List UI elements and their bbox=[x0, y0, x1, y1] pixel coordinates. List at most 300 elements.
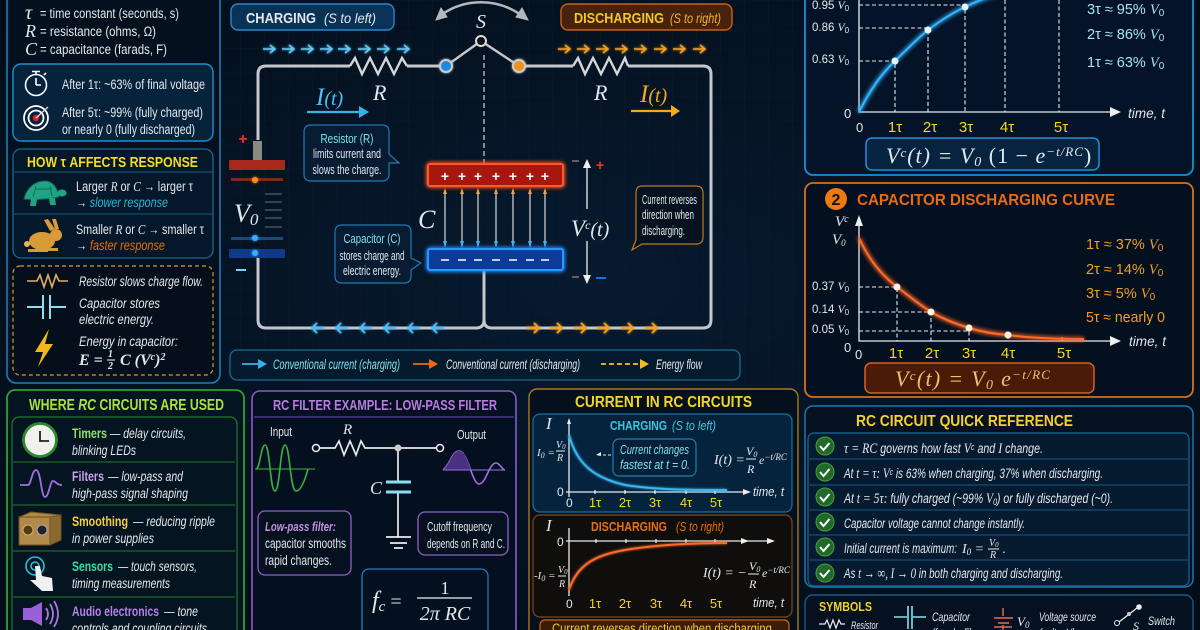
chart: capacitor charging: 0 bbox=[1159, 33, 1165, 44]
list: quick reference facts: At t = τ: V bbox=[844, 466, 901, 482]
battery V0: V bbox=[234, 199, 250, 228]
formula: discharging: 0 bbox=[986, 378, 994, 393]
chart: charging current: 4τ bbox=[680, 495, 693, 510]
chart: capacitor charging: 4τ bbox=[1000, 119, 1014, 136]
row: sensors: Sensors bbox=[72, 559, 113, 574]
callout: low-pass bbox=[258, 511, 351, 575]
chart: capacitor discharging: 4τ bbox=[1001, 345, 1015, 362]
input signal: Input bbox=[270, 425, 292, 439]
chart: charging current: = bbox=[545, 447, 555, 459]
arrows: charging current top bbox=[263, 45, 409, 53]
list: quick reference facts bbox=[843, 441, 1113, 582]
chart: capacitor discharging: 0.37 V bbox=[812, 281, 845, 293]
box: resistor, capacitor and energy notes: Resistor slows charge flow. bbox=[79, 274, 203, 289]
chart: capacitor charging: 0 bbox=[844, 106, 851, 121]
chart: charging current: 0 bbox=[566, 496, 573, 510]
symbol: voltage source bbox=[994, 608, 1096, 630]
chart: discharging current: 3τ bbox=[650, 596, 663, 611]
list: quick reference facts: is 63% when charging, 37% when discharging. bbox=[893, 466, 1103, 481]
electric field arrows bbox=[443, 188, 547, 248]
bottom plate bbox=[428, 249, 563, 270]
list: quick reference facts: Initial current is maximum: bbox=[844, 541, 957, 556]
chart: capacitor discharging: V bbox=[835, 214, 844, 230]
formula: charging: V bbox=[886, 143, 900, 168]
chart: discharging current: e bbox=[762, 566, 767, 580]
panel: definitions and response bbox=[7, 0, 220, 383]
legend: Conventional current (discharging) bbox=[446, 357, 580, 372]
row: audio electronics: Audio electronics bbox=[72, 604, 159, 619]
formula: cutoff frequency: c bbox=[379, 599, 386, 615]
symbol: switch bbox=[1114, 604, 1175, 630]
chart: capacitor discharging: 3τ ≈ 5% V bbox=[1086, 286, 1150, 302]
callout: resistor: limits current and bbox=[313, 146, 381, 161]
top plate: + bbox=[458, 168, 466, 184]
formula: charging: −t/RC bbox=[1046, 144, 1084, 159]
list: quick reference facts: τ = RC governs how fast V bbox=[844, 441, 983, 457]
formula: discharging: −t/RC bbox=[1012, 367, 1051, 382]
chart: charging current: I bbox=[545, 414, 553, 433]
formula: discharging bbox=[865, 363, 1094, 393]
icon: turtle bbox=[24, 181, 66, 206]
chart: capacitor discharging: V bbox=[832, 232, 841, 248]
chart: discharging current: 0 bbox=[756, 565, 760, 574]
panel: quick reference bbox=[805, 406, 1193, 587]
chart: discharging current: R bbox=[558, 579, 565, 590]
switch contacts bbox=[440, 36, 525, 72]
label: discharging bbox=[561, 4, 732, 30]
chart: capacitor discharging: time, t bbox=[1129, 334, 1167, 349]
label: charging bbox=[231, 4, 394, 30]
chart: charging current: 2τ bbox=[619, 495, 632, 510]
row: smoothing: — reducing ripple bbox=[132, 514, 215, 529]
icon: target bbox=[24, 106, 48, 130]
formula: charging: (t) = V bbox=[907, 143, 976, 168]
chart: capacitor discharging: 0 bbox=[845, 285, 850, 294]
text: variable definitions: = resistance (ohms, Ω) bbox=[40, 24, 156, 39]
chart: capacitor discharging: 0.05 V bbox=[812, 324, 845, 336]
chart: discharging current: 0 bbox=[541, 574, 545, 583]
row: smoothing bbox=[19, 512, 215, 546]
legend bbox=[230, 350, 740, 380]
list: quick reference facts: I bbox=[962, 542, 967, 557]
icon: speaker bbox=[23, 601, 58, 627]
chart: capacitor discharging: 3τ bbox=[962, 345, 976, 362]
row: smoothing: in power supplies bbox=[72, 531, 154, 546]
chart: charging current: V bbox=[746, 444, 753, 458]
top plate: + bbox=[474, 168, 482, 184]
label: S: S bbox=[476, 11, 486, 33]
formula: charging: ) bbox=[1084, 143, 1092, 168]
chart: charging current: 0 bbox=[562, 443, 566, 451]
chart: capacitor discharging: 0.14 V bbox=[812, 304, 845, 316]
labels: R and I(t) right: I(t) bbox=[639, 81, 668, 108]
callout: capacitor: Capacitor (C) bbox=[344, 231, 400, 246]
panel: current in RC circuits bbox=[529, 389, 798, 630]
formula: capacitor energy: ) bbox=[153, 352, 160, 369]
icon: lightning bolt bbox=[35, 329, 53, 367]
text: variable definitions: = time constant (seconds, s) bbox=[40, 6, 179, 21]
symbol: capacitor: Capacitor bbox=[932, 610, 971, 624]
chart: capacitor charging: time, t bbox=[1128, 106, 1166, 121]
callout: resistor: slows the charge. bbox=[312, 162, 382, 177]
chart: capacitor discharging: 0 bbox=[845, 328, 850, 337]
chart: capacitor discharging: 0 bbox=[855, 347, 862, 362]
chart: capacitor discharging: 0 bbox=[1158, 268, 1164, 279]
formula: charging bbox=[866, 138, 1099, 170]
chart: capacitor discharging: 5τ bbox=[1057, 345, 1071, 362]
top plate: + bbox=[492, 168, 500, 184]
callout: current reverses: direction when bbox=[642, 208, 694, 222]
chart: discharging current bbox=[533, 515, 792, 617]
chart: charging current: V bbox=[556, 440, 562, 451]
formula: charging: e bbox=[1036, 143, 1046, 168]
icons: check marks bbox=[816, 437, 834, 582]
box: time constant milestones: or nearly 0 (fully discharged) bbox=[62, 122, 195, 137]
callout: cutoff bbox=[418, 512, 508, 555]
row: timers: — delay circuits, bbox=[109, 426, 186, 441]
chart: discharging current: I(t) = − bbox=[702, 566, 747, 581]
row: smoothing: Smoothing bbox=[72, 514, 128, 529]
box: resistor, capacitor and energy notes: Energy in capacitor: bbox=[79, 334, 178, 349]
callout: current changes fastest: fastest at t = 0. bbox=[620, 457, 690, 472]
chart: capacitor discharging: 2τ ≈ 14% V bbox=[1086, 262, 1158, 278]
chart: capacitor discharging: 0 bbox=[844, 340, 851, 355]
chart: discharging current: 4τ bbox=[680, 596, 693, 611]
formula: capacitor energy: 2 bbox=[107, 361, 113, 372]
chart: capacitor discharging: 1τ ≈ 37% V bbox=[1086, 237, 1158, 253]
chart: capacitor charging: 0 bbox=[845, 26, 850, 35]
callout: cutoff: Cutoff frequency bbox=[427, 520, 493, 534]
callout: low-pass: capacitor smooths bbox=[265, 536, 346, 551]
row: sensors: timing measurements bbox=[72, 576, 170, 591]
icon: rabbit bbox=[24, 219, 62, 252]
row: sensors: — touch sensors, bbox=[117, 559, 197, 574]
label: charging: (S to left) bbox=[324, 10, 376, 26]
chart: discharging current: = bbox=[545, 570, 556, 582]
formula: capacitor energy: E = bbox=[78, 352, 103, 369]
chart: discharging current: I bbox=[545, 516, 553, 535]
heading: how tau affects response: HOW τ AFFECTS RESPONSE bbox=[27, 154, 198, 171]
list: quick reference facts: 0 bbox=[967, 547, 972, 557]
box: how tau affects response: → slower response bbox=[76, 195, 168, 210]
heading: where used: WHERE RC CIRCUITS ARE USED bbox=[29, 397, 224, 414]
chart: discharging current: V bbox=[558, 565, 564, 576]
symbol: resistor bbox=[819, 620, 879, 630]
callout: capacitor: stores charge and bbox=[340, 248, 404, 263]
chart: discharging current: DISCHARGING bbox=[591, 519, 667, 534]
row: audio electronics: — tone bbox=[163, 604, 198, 619]
box: time constant milestones: After 1τ: ~63% of final voltage bbox=[62, 77, 205, 92]
chart: capacitor discharging bbox=[812, 214, 1167, 362]
callout: current reverses bbox=[632, 186, 703, 250]
formula: capacitor energy bbox=[78, 349, 165, 372]
symbol: voltage source: Voltage source bbox=[1039, 610, 1096, 624]
icon: clock bbox=[24, 424, 56, 456]
battery V0: + bbox=[238, 131, 248, 148]
box: how tau affects response: Larger R or C → larger τ bbox=[76, 179, 194, 195]
chart: discharging current: 0 bbox=[557, 535, 564, 549]
chart: charging current: R bbox=[556, 453, 563, 464]
chart: capacitor charging: 0 bbox=[1159, 61, 1165, 72]
heading: discharging curve: 2 bbox=[832, 192, 841, 209]
labels: R and I(t) left: R bbox=[372, 80, 387, 105]
capacitor voltage arrow bbox=[571, 157, 610, 284]
list: quick reference facts: . bbox=[1002, 541, 1006, 556]
filter circuit: R bbox=[342, 422, 352, 438]
chart: capacitor discharging: 0 bbox=[1150, 292, 1156, 303]
chart: discharging current: −t/RC bbox=[767, 565, 791, 575]
legend: Energy flow bbox=[656, 357, 703, 372]
capacitor voltage arrow: V bbox=[571, 216, 585, 241]
chart: charging current: R bbox=[746, 462, 755, 476]
capacitor voltage arrow: + bbox=[596, 157, 605, 174]
heading: discharging curve: CAPACITOR DISCHARGING CURVE bbox=[857, 192, 1115, 209]
callout: resistor: Resistor (R) bbox=[320, 131, 374, 146]
icon: filter wave bbox=[20, 470, 62, 497]
row: timers bbox=[24, 424, 186, 458]
chart: capacitor charging: 1τ ≈ 63% V bbox=[1087, 55, 1159, 71]
chart: capacitor charging: 0 bbox=[856, 120, 863, 135]
row: filters: high-pass signal shaping bbox=[72, 486, 188, 501]
row: sensors bbox=[26, 557, 197, 591]
row: audio electronics bbox=[23, 601, 207, 630]
symbol: switch: Switch bbox=[1148, 614, 1175, 628]
chart: capacitor charging: 5τ bbox=[1054, 119, 1068, 136]
label: discharging: DISCHARGING bbox=[574, 10, 664, 27]
heading: filter example: RC FILTER EXAMPLE: LOW-PASS FILTER bbox=[273, 397, 497, 414]
formula: charging: c bbox=[900, 145, 907, 160]
heading: discharging curve bbox=[825, 188, 1115, 210]
chart: discharging current: (S to right) bbox=[676, 519, 724, 534]
panel: charging curve bbox=[805, 0, 1193, 175]
text: variable definitions: R bbox=[24, 21, 36, 41]
formula: capacitor energy: 1 bbox=[108, 349, 113, 360]
chart: charging current: e bbox=[759, 453, 764, 467]
output signal bbox=[443, 428, 505, 484]
circuit wires bbox=[258, 41, 711, 328]
chart: charging current: 0 bbox=[753, 450, 757, 459]
filter circuit bbox=[312, 422, 444, 548]
callout: current reverses: discharging. bbox=[642, 224, 685, 238]
chart: capacitor charging: 0 bbox=[1159, 8, 1165, 19]
row: timers: Timers bbox=[72, 426, 107, 441]
capacitor voltage arrow: (t) bbox=[590, 219, 610, 241]
label: C: C bbox=[418, 205, 436, 234]
labels: R and I(t) left: I(t) bbox=[315, 84, 344, 111]
formula: charging: (1 − bbox=[982, 143, 1036, 168]
chart: capacitor charging: 1τ bbox=[888, 119, 902, 136]
arrows: discharging current top bbox=[558, 45, 705, 53]
battery V0 bbox=[229, 131, 285, 270]
callout: current changes fastest bbox=[596, 439, 696, 476]
top plate: + bbox=[526, 168, 534, 184]
top plate: + bbox=[441, 168, 449, 184]
formula: discharging: e bbox=[994, 366, 1012, 391]
text: variable definitions: C bbox=[25, 39, 38, 59]
chart: capacitor charging bbox=[812, 0, 1166, 136]
panel: symbols bbox=[805, 595, 1193, 630]
chart: capacitor charging: 0.86 V bbox=[812, 22, 845, 34]
top plate: + bbox=[509, 168, 517, 184]
chart: discharging current: 5τ bbox=[710, 596, 723, 611]
chart: capacitor discharging: 0 bbox=[845, 308, 850, 317]
chart: charging current: 0 bbox=[557, 485, 564, 499]
list: quick reference facts: At t = 5τ: fully charged (~99% V bbox=[844, 491, 1011, 507]
chart: charging current: (S to left) bbox=[672, 418, 716, 433]
row: filters: — low-pass and bbox=[107, 469, 183, 484]
callout: current reverses: Current reverses bbox=[642, 193, 697, 207]
chart: discharging current: time, t bbox=[753, 596, 784, 610]
top plate bbox=[428, 164, 563, 186]
callout: capacitor: electric energy. bbox=[343, 263, 401, 278]
input signal bbox=[255, 425, 315, 491]
icon: resistor bbox=[27, 275, 68, 287]
chart: capacitor charging: 3τ bbox=[959, 119, 973, 136]
chart: discharging current: 1τ bbox=[589, 596, 602, 611]
text: variable definitions: = capacitance (farads, F) bbox=[40, 42, 167, 57]
callout: cutoff: depends on R and C. bbox=[427, 537, 505, 551]
top plate: + bbox=[541, 168, 549, 184]
chart: charging current: 5τ bbox=[710, 495, 723, 510]
row: timers: blinking LEDs bbox=[72, 443, 136, 458]
box: time constant milestones bbox=[13, 64, 213, 141]
box: how tau affects response: → faster response bbox=[76, 238, 165, 253]
formula: discharging: (t) = V bbox=[917, 366, 987, 391]
chart: charging current: CHARGING bbox=[610, 418, 667, 433]
panel: discharging curve bbox=[805, 183, 1193, 397]
chart: capacitor charging: 0.63 V bbox=[812, 54, 845, 66]
callout: current changes fastest: Current changes bbox=[620, 442, 689, 457]
icon: radio box bbox=[19, 512, 61, 545]
panel: where RC circuits are used bbox=[7, 390, 244, 630]
arrows: discharging current bottom bbox=[527, 323, 657, 333]
chart: capacitor charging: 2τ bbox=[923, 119, 937, 136]
chart: capacitor discharging: 0 bbox=[1158, 243, 1164, 254]
list: quick reference facts: c bbox=[890, 467, 893, 477]
chart: discharging current: -I bbox=[534, 570, 541, 582]
formula: cutoff frequency: = bbox=[385, 591, 402, 613]
arrow: switch throw bbox=[436, 2, 528, 20]
symbol: capacitor bbox=[894, 606, 972, 630]
list: quick reference facts: 0 bbox=[993, 497, 997, 507]
chart: capacitor discharging: 5τ ≈ nearly 0 bbox=[1086, 310, 1165, 326]
list: quick reference facts: Capacitor voltage cannot change instantly. bbox=[844, 516, 1025, 531]
formula: cutoff frequency: 1 bbox=[440, 578, 450, 598]
formula: capacitor energy: 2 bbox=[159, 352, 165, 363]
formula: charging: 0 bbox=[974, 155, 982, 170]
box: how tau affects response bbox=[13, 149, 213, 258]
chart: capacitor charging: 2τ ≈ 86% V bbox=[1087, 27, 1159, 43]
chart: charging current: 1τ bbox=[589, 495, 602, 510]
formula: capacitor energy: C (V bbox=[120, 352, 151, 369]
box: resistor, capacitor and energy notes: Capacitor stores bbox=[79, 296, 160, 311]
labels: R and I(t) left bbox=[307, 80, 387, 118]
chart: capacitor charging: 0 bbox=[845, 4, 850, 13]
formula: discharging: c bbox=[910, 368, 917, 383]
capacitor voltage arrow: c bbox=[585, 218, 591, 232]
chart: capacitor charging: 0 bbox=[845, 58, 850, 67]
chart: capacitor discharging: 2τ bbox=[925, 345, 939, 362]
capacitor bbox=[418, 164, 563, 270]
label: discharging: (S to right) bbox=[670, 10, 721, 26]
panel: low-pass filter example bbox=[252, 391, 516, 630]
text: variable definitions bbox=[24, 2, 179, 59]
box: time constant milestones: After 5τ: ~99% (fully charged) bbox=[62, 105, 203, 120]
list: quick reference facts: V bbox=[989, 538, 995, 549]
icon: stopwatch bbox=[26, 72, 46, 96]
callout: capacitor bbox=[335, 225, 421, 283]
chart: capacitor discharging: 1τ bbox=[889, 345, 903, 362]
heading: symbols: SYMBOLS bbox=[819, 599, 872, 614]
chart: charging current: −t/RC bbox=[764, 452, 788, 462]
chart: charging current: 0 bbox=[541, 451, 545, 460]
chart: capacitor discharging: c bbox=[844, 214, 849, 225]
chart: charging current: 3τ bbox=[649, 495, 662, 510]
formula: cutoff frequency bbox=[362, 569, 488, 630]
arrows: charging current bottom bbox=[312, 323, 444, 333]
chart: discharging current: 0 bbox=[566, 597, 573, 611]
heading: current: CURRENT IN RC CIRCUITS bbox=[575, 394, 752, 411]
label: charging: CHARGING bbox=[246, 10, 316, 27]
symbol: voltage source: V bbox=[1017, 614, 1025, 629]
formula: discharging: V bbox=[895, 366, 910, 391]
output signal: Output bbox=[457, 428, 486, 442]
chart: capacitor charging: 0.95 V bbox=[812, 0, 845, 12]
box: resistor, capacitor and energy notes bbox=[13, 266, 213, 375]
icon: capacitor bbox=[27, 295, 66, 319]
list: quick reference facts: 0 bbox=[995, 541, 999, 549]
list: quick reference facts: and bbox=[974, 441, 998, 456]
callout: resistor bbox=[304, 125, 399, 181]
chart: charging current: I bbox=[537, 447, 541, 459]
list: quick reference facts: c bbox=[971, 442, 975, 452]
list: quick reference facts: = bbox=[971, 542, 984, 557]
legend: Conventional current (charging) bbox=[273, 357, 400, 372]
chart: discharging current: V bbox=[749, 559, 756, 573]
formula: cutoff frequency: 2π RC bbox=[420, 603, 471, 625]
chart: capacitor charging: 3τ ≈ 95% V bbox=[1087, 2, 1159, 18]
list: quick reference facts: As t → ∞, I → 0 in both charging and discharging. bbox=[843, 566, 1063, 582]
chart: charging current bbox=[533, 414, 792, 512]
callout: low-pass: Low-pass filter: bbox=[265, 519, 336, 534]
icon: touch hand bbox=[26, 557, 53, 591]
chart: discharging current: R bbox=[748, 577, 757, 591]
row: filters bbox=[20, 469, 188, 501]
chart: charging current: I(t) = bbox=[713, 453, 745, 468]
formula: cutoff frequency: f bbox=[372, 588, 379, 614]
formula: capacitor energy: c bbox=[151, 352, 156, 363]
list: quick reference facts: I change. bbox=[998, 441, 1054, 457]
row: filters: Filters bbox=[72, 469, 104, 484]
list: quick reference facts: ) or fully discharged (~0). bbox=[995, 491, 1113, 506]
chart: capacitor discharging: 0 bbox=[841, 238, 846, 248]
labels: R and I(t) right bbox=[593, 80, 680, 117]
chart: charging current: time, t bbox=[753, 485, 784, 499]
heading: quick reference: RC CIRCUIT QUICK REFERENCE bbox=[856, 413, 1073, 430]
box: how tau affects response: Smaller R or C → smaller τ bbox=[76, 222, 205, 238]
labels: R and I(t) right: R bbox=[593, 80, 608, 105]
symbol: voltage source: 0 bbox=[1025, 620, 1030, 630]
chart: discharging current: 0 bbox=[564, 568, 568, 576]
list: quick reference facts: R bbox=[989, 550, 996, 561]
panel: circuit diagram bbox=[229, 2, 740, 380]
callout: low-pass: rapid changes. bbox=[265, 553, 332, 568]
battery V0: 0 bbox=[250, 210, 259, 229]
box: resistor, capacitor and energy notes: electric energy. bbox=[79, 312, 154, 327]
filter circuit: C bbox=[370, 478, 383, 498]
chart: discharging current: 2τ bbox=[619, 596, 632, 611]
text: variable definitions: τ bbox=[25, 2, 33, 24]
